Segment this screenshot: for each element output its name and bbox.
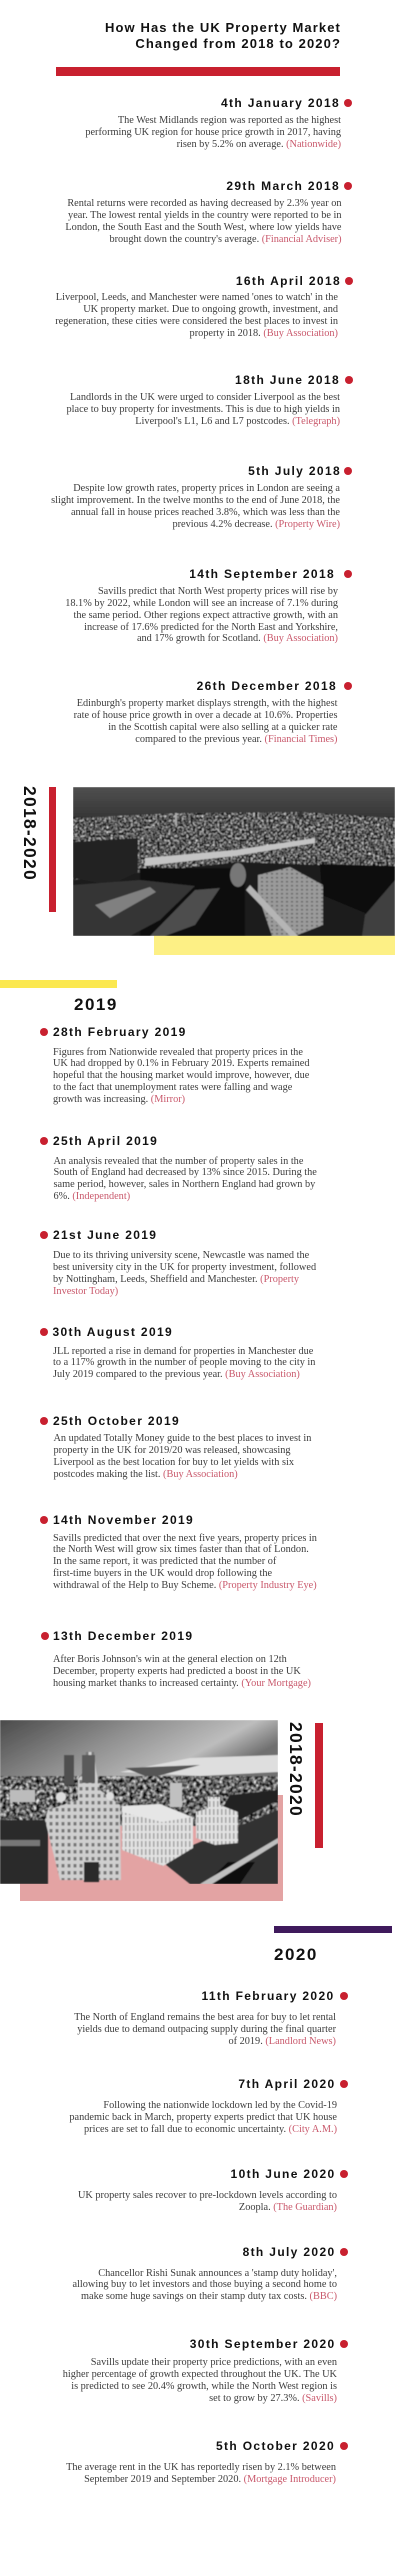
title: Changed from 2018 to 2020? [135, 36, 341, 51]
date: 5th July 2018 [248, 464, 341, 478]
date: 25th October 2019 [53, 1414, 180, 1428]
body text: hopeful that the housing market would improve, however, due [53, 1070, 309, 1081]
event: 8th July 2020 [72, 2245, 348, 2302]
body text: South of England had decreased by 13% since 2015. During the [54, 1167, 317, 1178]
body text: Chancellor Rishi Sunak announces a 'stamp duty holiday', [98, 2268, 337, 2278]
timeline dot [40, 1328, 48, 1336]
date: 10th June 2020 [231, 2167, 336, 2181]
body text: performing UK region for house price growth in 2017, having [85, 127, 341, 138]
timeline dot [40, 1028, 48, 1036]
body text: risen by 5.2% on average. (Nationwide) [177, 139, 341, 150]
body text: higher percentage of growth expected throughout the UK. The UK [63, 2369, 337, 2380]
body text: by Nottingham, Leeds, Sheffield and Manchester. (Property [53, 1274, 299, 1285]
event: 25th April 2019 [40, 1134, 317, 1202]
body text: best university city in the UK for property investment, followed [53, 1262, 316, 1273]
body text: to the fact that unemployment rates were falling and wage [53, 1082, 292, 1093]
body text: Edinburgh's property market displays strength, with the highest [77, 698, 338, 709]
timeline dot [340, 1992, 348, 2000]
body text: The North of England remains the best area for buy to let rental [74, 2012, 336, 2023]
pink block behind photo [20, 1795, 283, 1900]
timeline dot [340, 2080, 348, 2088]
timeline dot [344, 99, 352, 107]
body text: Despite low growth rates, property prices in London are seeing a [73, 483, 340, 494]
date: 25th April 2019 [53, 1134, 158, 1148]
body text: slight improvement. In the twelve months to the end of June 2018, the [51, 495, 340, 506]
body text: first-time buyers in the UK would drop following the [53, 1568, 272, 1579]
body text: previous 4.2% decrease. (Property Wire) [172, 519, 340, 530]
body text: Following the nationwide lockdown led by the Covid-19 [103, 2100, 337, 2111]
event: 30th September 2020 [62, 2337, 348, 2404]
yellow block under photo [154, 935, 395, 954]
date: 18th June 2018 [235, 373, 340, 387]
title: How Has the UK Property Market [105, 20, 341, 35]
body text: Liverpool, Leeds, and Manchester were named 'ones to watch' in the [56, 292, 338, 303]
body text: housing market thanks to increased certainty. (Your Mortgage) [53, 1678, 311, 1689]
timeline dot [344, 277, 352, 285]
body text: Liverpool's L1, L6 and L7 postcodes. (Telegraph) [135, 416, 340, 427]
body text: rate of house price growth in over a decade at 10.6%. Properties [74, 710, 338, 721]
date: 28th February 2019 [53, 1025, 187, 1039]
body text: Due to its thriving university scene, Newcastle was named the [53, 1250, 309, 1261]
body text: 6%. (Independent) [54, 1191, 130, 1202]
body text [53, 1532, 317, 1591]
body text: UK property market. Due to ongoing growth, investment, and [83, 304, 338, 315]
event: 29th March 2018 [65, 179, 352, 245]
body text: property in 2018. (Buy Association) [190, 328, 338, 339]
body text [53, 1654, 311, 1689]
body text: Investor Today) [53, 1286, 118, 1297]
timeline dot [40, 1416, 48, 1424]
body text [74, 2012, 336, 2047]
body text: Rental returns were recorded as having decreased by 2.3% year on [67, 198, 342, 209]
body text [69, 2100, 337, 2135]
body text: allowing buy to let investors and those buying a second home to [72, 2279, 337, 2290]
body text [55, 292, 338, 339]
timeline dot [340, 2442, 348, 2450]
body text: the North West will grow six times faster than that of London. [53, 1544, 309, 1555]
body text: brought down the country's average. (Financial Adviser) [109, 234, 342, 245]
body text: make some huge savings on their stamp duty tax costs. (BBC) [81, 2291, 337, 2302]
body text: 18.1% by 2022, while London will see an increase of 7.1% during [65, 598, 338, 609]
photo: Liverpool docks at night [73, 787, 395, 936]
timeline dot [340, 2248, 348, 2256]
date: 8th July 2020 [243, 2245, 336, 2259]
heading 2020: 2020 [274, 1945, 318, 1964]
body text: London, the South East and the South West, where low yields have [65, 222, 342, 233]
vertical label 2018-2020: 2018-2020 [20, 786, 40, 880]
timeline dot [340, 2340, 348, 2348]
body text [54, 1156, 317, 1202]
date: 16th April 2018 [236, 274, 341, 288]
date: 11th February 2020 [201, 1989, 334, 2003]
event: 30th August 2019 [40, 1325, 316, 1380]
event: 4th January 2018 [85, 96, 352, 150]
body text: set to grow by 27.3%. (Savills) [209, 2393, 337, 2404]
body text: UK had dropped by 0.1% in February 2019. Experts remained [53, 1058, 310, 1069]
body text: July 2019 compared to the previous year. (Buy Association) [53, 1369, 300, 1380]
body text: pandemic back in March, property experts predict that UK house [69, 2112, 337, 2123]
title underline bar [56, 66, 340, 76]
event: 14th September 2018 [65, 567, 352, 644]
body text: and 17% growth for Scotland. (Buy Association) [137, 633, 338, 644]
body text: annual fall in house prices reached 3.8%, which was less than the [71, 507, 340, 518]
event: 13th December 2019 [41, 1629, 311, 1689]
timeline dot [340, 2170, 348, 2178]
body text: UK property sales recover to pre-lockdown levels according to [78, 2190, 337, 2201]
body text: the same period. Other regions expect attractive growth, with an [74, 610, 338, 621]
body text: Landlords in the UK were urged to consider Liverpool as the best [70, 392, 340, 403]
title [105, 20, 341, 51]
date: 13th December 2019 [53, 1629, 193, 1643]
body text [51, 483, 340, 530]
timeline dot [40, 1632, 48, 1640]
body text: increase of 17.6% predicted for the North East and Yorkshire, [84, 622, 338, 633]
event: 25th October 2019 [40, 1414, 312, 1480]
body text [72, 2268, 337, 2302]
date: 4th January 2018 [221, 96, 340, 110]
body text: Zoopla. (The Guardian) [239, 2202, 337, 2213]
event: 21st June 2019 [40, 1228, 316, 1297]
date: 21st June 2019 [53, 1228, 157, 1242]
yellow bar: 2019 section [0, 980, 117, 988]
vertical label 2018-2020: 2018-2020 [286, 1722, 306, 1816]
body text [78, 2190, 337, 2213]
body text: to a 117% growth in the number of people moving to the city in [53, 1357, 315, 1368]
timeline dot [344, 466, 352, 474]
body text [65, 198, 342, 245]
date: 26th December 2018 [197, 679, 337, 693]
body text: An analysis revealed that the number of property sales in the [54, 1156, 303, 1166]
body text: The average rent in the UK has reportedly risen by 2.1% between [66, 2462, 336, 2473]
body text: regeneration, these cities were considered the best places to invest in [55, 316, 338, 327]
timeline dot [40, 1231, 48, 1239]
date: 7th April 2020 [238, 2077, 336, 2091]
body text [65, 586, 338, 644]
body text: Figures from Nationwide revealed that property prices in the [53, 1046, 303, 1058]
event: 14th November 2019 [40, 1513, 317, 1591]
body text [53, 1346, 316, 1380]
date: 14th September 2018 [189, 567, 335, 581]
body text [85, 115, 341, 150]
red vertical bar [48, 786, 56, 912]
body text: yields due to demand outpacing supply during the final quarter [77, 2024, 336, 2035]
body text: JLL reported a rise in demand for properties in Manchester due [53, 1346, 313, 1356]
event: 28th February 2019 [40, 1025, 310, 1105]
body text [66, 2462, 336, 2486]
body text: Liverpool as the best location for buy to let yields with six [54, 1457, 294, 1468]
body text: Savills predict that North West property prices will rise by [98, 586, 338, 597]
event: 5th July 2018 [51, 464, 352, 530]
body text: The West Midlands region was reported as the highest [118, 115, 341, 126]
purple bar: 2020 section [274, 1926, 392, 1932]
body text: of 2019. (Landlord News) [228, 2036, 336, 2047]
body text: is predicted to see 20.4% growth, while the North West region is [71, 2381, 337, 2392]
event: 10th June 2020 [78, 2167, 348, 2213]
event: 26th December 2018 [74, 679, 352, 745]
body text: property in the UK for 2019/20 was released, showcasing [54, 1445, 291, 1456]
timeline dot [344, 182, 352, 190]
body text: September 2019 and September 2020. (Mortgage Introducer) [84, 2474, 336, 2485]
body text [53, 1250, 316, 1297]
body text: year. The lowest rental yields in the country were reported to be in [68, 210, 342, 221]
event: 7th April 2020 [69, 2077, 348, 2135]
body text: Savills predicted that over the next five years, property prices in [53, 1532, 317, 1544]
event: 18th June 2018 [66, 373, 353, 427]
body text [54, 1433, 312, 1480]
heading 2019: 2019 [74, 995, 118, 1014]
timeline dot [344, 376, 352, 384]
timeline dot [40, 1516, 48, 1524]
body text: Savills update their property price predictions, with an even [91, 2357, 337, 2368]
body text: growth was increasing. (Mirror) [53, 1094, 185, 1105]
body text: compared to the previous year. (Financial Times) [135, 734, 338, 745]
timeline dot [344, 570, 352, 578]
body text: An updated Totally Money guide to the best places to invest in [54, 1433, 311, 1444]
body text: prices are set to fall due to economic uncertainty. (City A.M.) [84, 2124, 337, 2135]
photo: Liverpool waterfront [0, 1720, 278, 1884]
event: 16th April 2018 [55, 274, 353, 339]
red vertical bar [315, 1722, 322, 1848]
body text: same period, however, sales in Northern England had grown by [54, 1179, 315, 1190]
body text: postcodes making the list. (Buy Association) [54, 1469, 238, 1480]
body text: December, property experts had predicted a boost in the UK [53, 1666, 301, 1677]
body text: withdrawal of the Help to Buy Scheme. (Property Industry Eye) [53, 1580, 317, 1591]
body text [53, 1046, 310, 1105]
timeline dot [344, 682, 352, 690]
body text: in the Scottish capital were also selling at a quicker rate [108, 722, 338, 733]
timeline dot [40, 1137, 48, 1145]
body text [66, 392, 340, 427]
body text [74, 698, 338, 745]
date: 5th October 2020 [216, 2439, 335, 2453]
event: 5th October 2020 [0, 2439, 395, 2487]
body text [63, 2357, 337, 2404]
date: 29th March 2018 [226, 179, 340, 193]
body text: In the same report, it was predicted that the number of [53, 1556, 276, 1567]
body text: After Boris Johnson's win at the general election on 12th [53, 1654, 287, 1665]
date: 14th November 2019 [53, 1513, 194, 1527]
body text: place to buy property for investments. This is due to high yields in [66, 404, 340, 415]
date: 30th September 2020 [190, 2337, 336, 2351]
event: 11th February 2020 [74, 1989, 348, 2047]
date: 30th August 2019 [52, 1325, 173, 1339]
